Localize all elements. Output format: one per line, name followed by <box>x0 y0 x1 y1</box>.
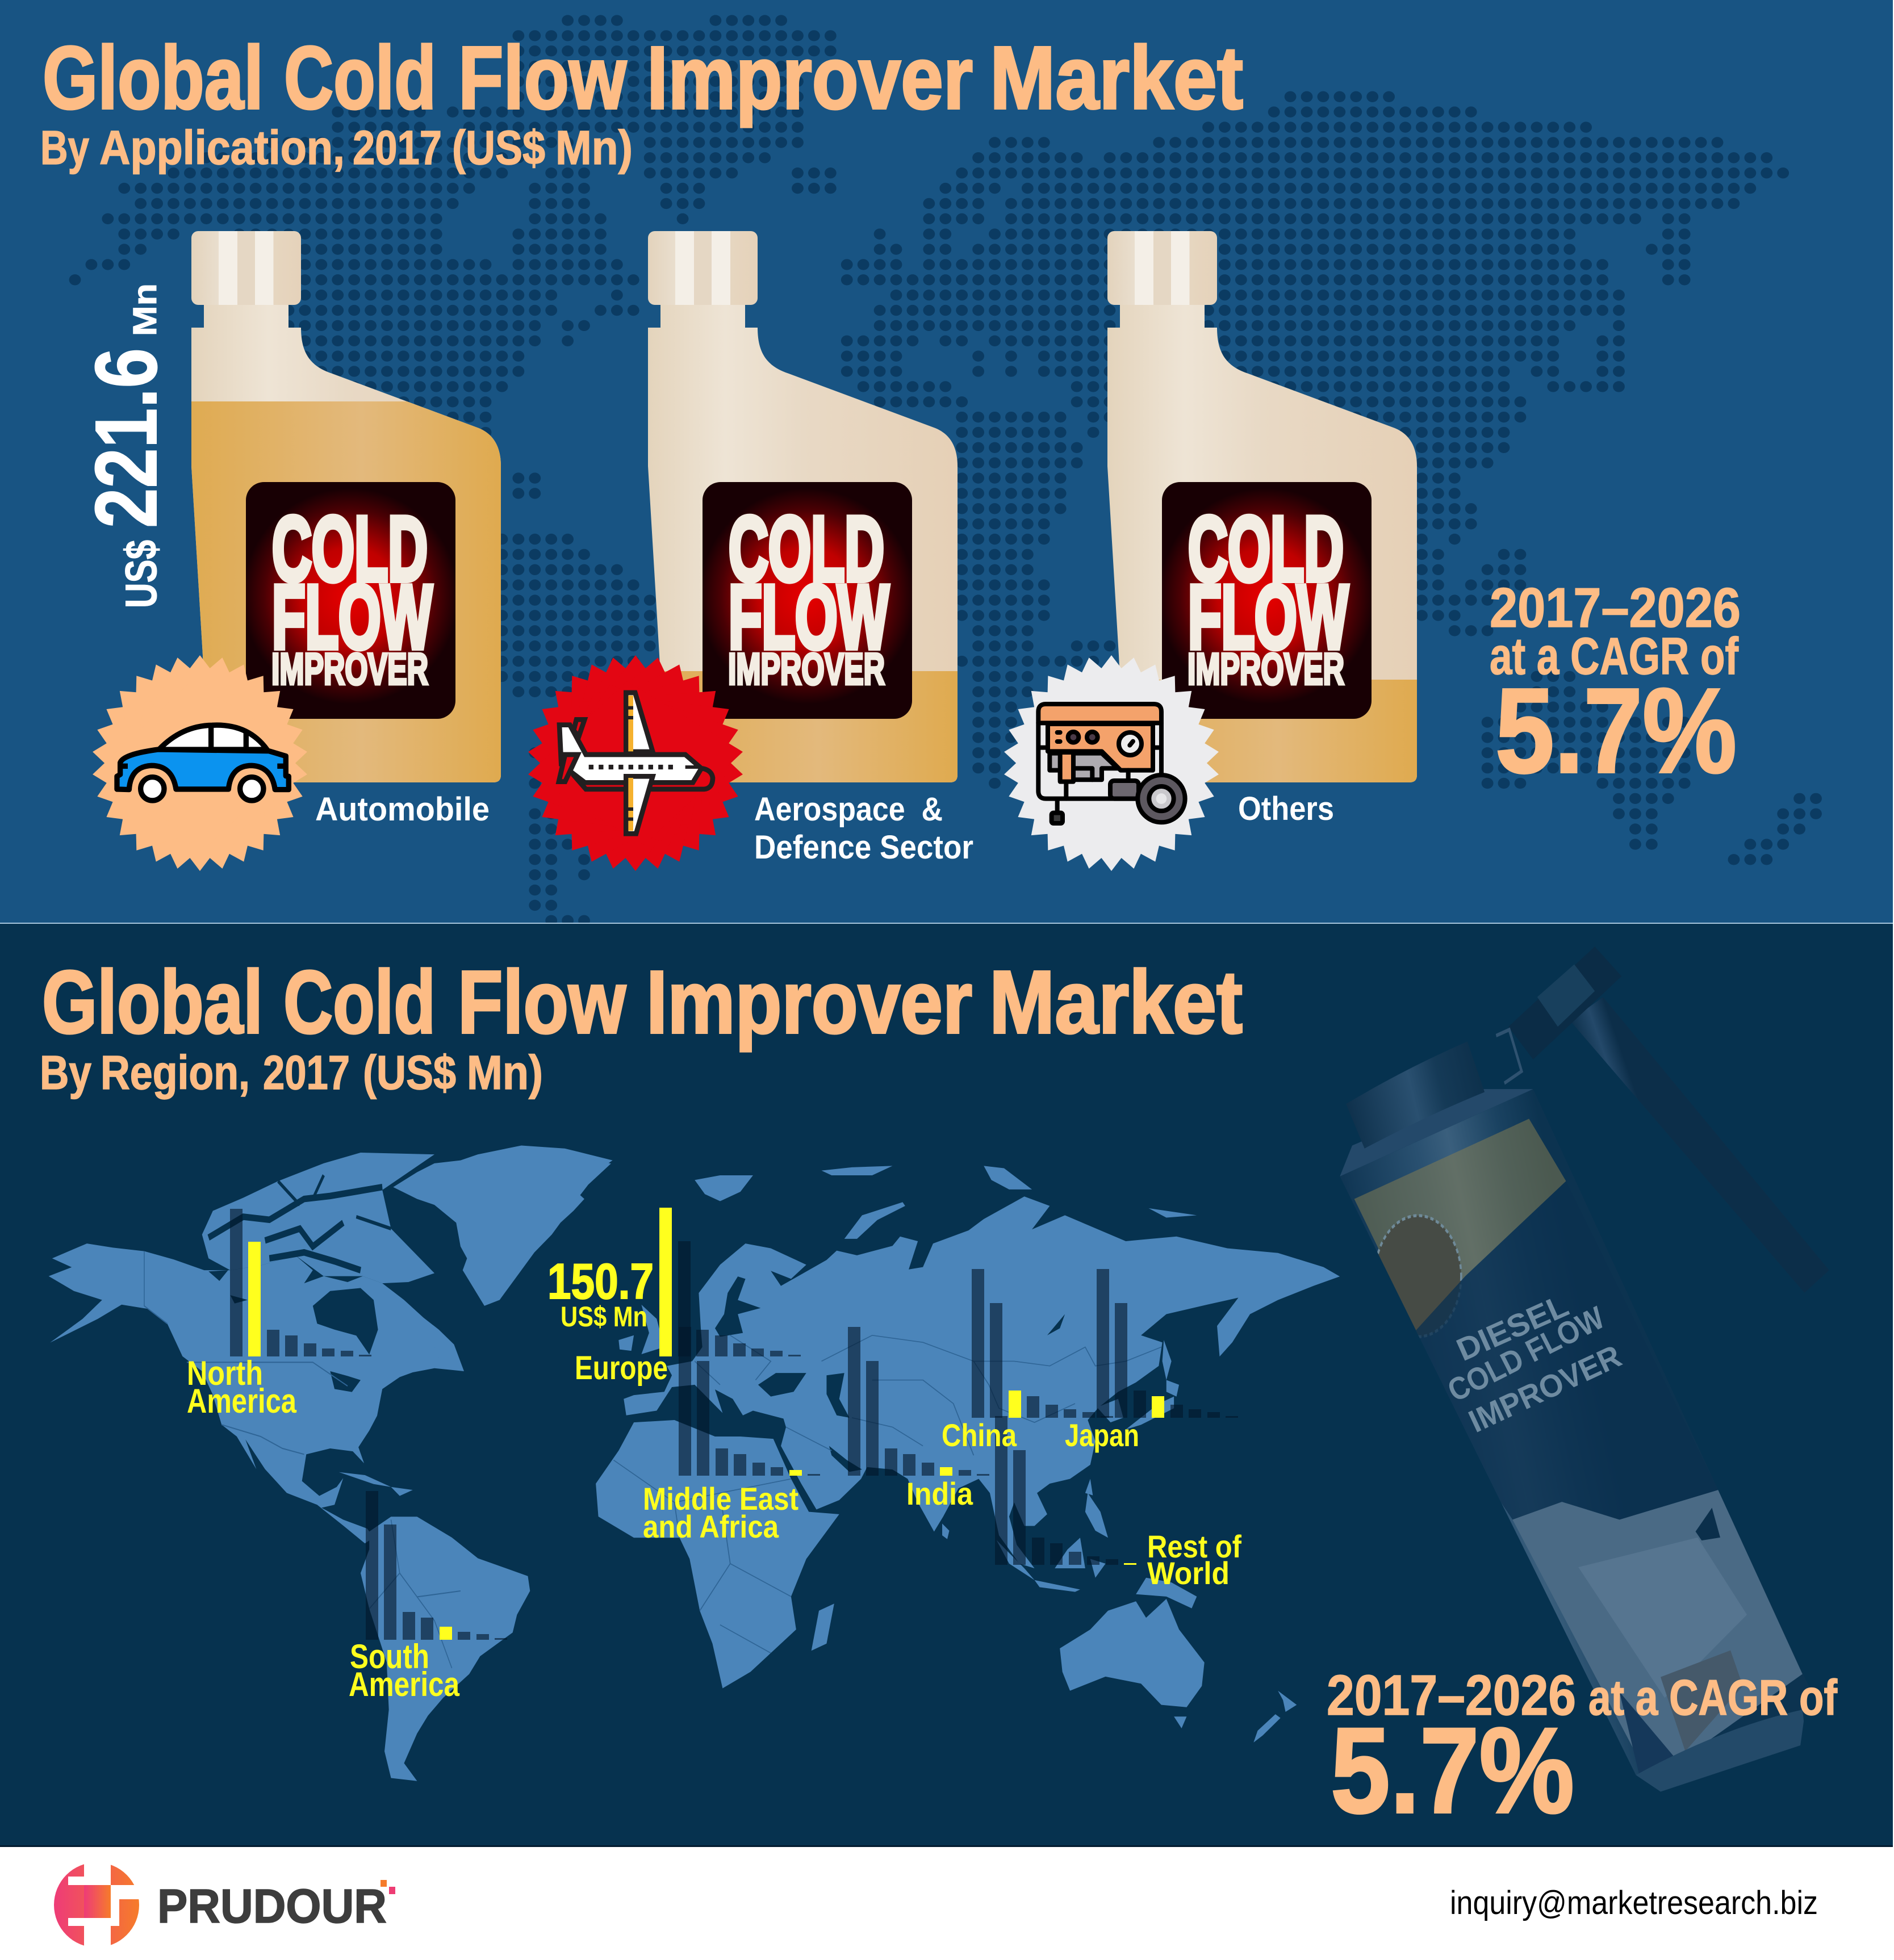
world map: Americas and Greenland <box>49 1145 613 1781</box>
bottle: others <box>1107 231 1417 783</box>
label: Rest of World <box>1147 1528 1241 1591</box>
bottle: aerospace: COLD <box>729 498 884 600</box>
title: by application: Cold <box>284 28 436 128</box>
badge: automobile star <box>65 627 335 899</box>
title: by application: Flow <box>458 28 627 128</box>
title: by application <box>40 28 1243 174</box>
bottle: automobile: FLOW <box>272 567 432 667</box>
bottom edge line <box>0 1845 1893 1847</box>
bottle photo: diesel cold flow improver: DIESEL <box>1451 1287 1574 1368</box>
callout: CAGR region <box>1327 1664 1838 1838</box>
label: South America <box>349 1637 460 1703</box>
callout: CAGR application: 5.7% <box>1495 663 1737 798</box>
bottle photo: diesel cold flow improver <box>1340 947 1829 1792</box>
divider line <box>0 923 1893 924</box>
label: aerospace and defence sector: Defence Sector <box>754 829 973 866</box>
logo: Prudour <box>54 1862 395 1948</box>
label: aerospace and defence sector <box>754 791 973 866</box>
bottle: others: FLOW <box>1188 567 1348 667</box>
bottle: aerospace <box>648 231 958 783</box>
bottle: automobile: IMPROVER <box>271 644 428 694</box>
bar chart: North America <box>230 1209 371 1356</box>
bottle: others: COLD <box>1188 498 1344 600</box>
title: by application: Global <box>43 28 264 128</box>
label: India: India <box>906 1476 973 1511</box>
title: by region: Market <box>989 953 1243 1052</box>
title: by region <box>40 953 1243 1099</box>
bottle: aerospace: IMPROVER <box>728 644 885 694</box>
logo: Prudour: PRUDOUR <box>157 1879 387 1933</box>
bottle: aerospace: FLOW <box>729 567 889 667</box>
label: others: Others <box>1238 790 1334 827</box>
value callout: Europe 150.7: Europe <box>575 1350 668 1387</box>
title: by region: Improver <box>646 953 972 1052</box>
title: by application: Improver <box>647 28 973 128</box>
title: by region: Cold <box>283 953 436 1052</box>
bottle photo: diesel cold flow improver: IMPROVER <box>1463 1338 1627 1439</box>
title: by application: Application, <box>99 121 345 174</box>
bottle: automobile <box>191 231 501 783</box>
icon: generator <box>1038 704 1185 823</box>
title: by region: Mn) <box>467 1046 543 1099</box>
bar chart: Rest of World <box>995 1416 1136 1565</box>
icon: airplane <box>559 693 713 834</box>
value callout: US$ 221.6 Mn: Mn <box>127 283 164 336</box>
bar chart: India <box>848 1327 989 1476</box>
bottle photo: diesel cold flow improver: COLD FLOW <box>1442 1299 1610 1409</box>
callout: CAGR region: 5.7% <box>1331 1703 1574 1838</box>
bar chart: Japan <box>1097 1269 1238 1418</box>
title: by region: By <box>40 1046 91 1099</box>
label: South America: South <box>350 1637 429 1676</box>
value callout: Europe 150.7: 150.7 <box>547 1253 654 1309</box>
value callout: Europe 150.7: US$ Mn <box>561 1301 647 1333</box>
value callout: US$ 221.6 Mn <box>77 283 175 608</box>
icon: car <box>117 725 289 801</box>
panel: by region background <box>0 924 1893 1845</box>
label: China: China <box>942 1417 1017 1453</box>
label: Rest of World: Rest of <box>1147 1528 1241 1564</box>
title: by application: Mn) <box>555 121 633 174</box>
label: Japan: Japan <box>1065 1417 1139 1453</box>
bar chart: South America <box>366 1491 507 1640</box>
bar chart: Middle East and Africa <box>679 1327 820 1476</box>
bar chart: Europe <box>659 1208 801 1356</box>
label: North America: America <box>187 1382 297 1420</box>
title: by region: 2017 <box>263 1046 350 1099</box>
value callout: Europe 150.7 <box>547 1253 668 1387</box>
panel: by application background <box>0 0 1893 923</box>
value callout: US$ 221.6 Mn: US$ <box>116 540 166 608</box>
callout: CAGR application: 2017–2026 <box>1490 576 1741 639</box>
label: North America <box>187 1354 297 1420</box>
title: by region: Flow <box>458 953 626 1052</box>
label: Middle East and Africa <box>643 1481 798 1544</box>
callout: CAGR region: at a CAGR of <box>1588 1669 1838 1726</box>
label: South America: America <box>349 1665 460 1703</box>
value callout: US$ 221.6 Mn: 221.6 <box>77 348 175 528</box>
badge: others star <box>976 627 1247 899</box>
callout: CAGR region: 2017–2026 <box>1327 1664 1576 1727</box>
title: by region: Region, <box>101 1046 250 1099</box>
title: by application: (US$ <box>452 121 545 174</box>
callout: CAGR application <box>1490 576 1741 798</box>
label: North America: North <box>187 1354 263 1392</box>
title: by region: Global <box>42 953 263 1052</box>
title: by region: (US$ <box>363 1046 456 1099</box>
world map: Eurasia, Africa, Oceania <box>568 1151 1340 1743</box>
label: Rest of World: World <box>1147 1555 1230 1591</box>
title: by application: By <box>40 121 89 174</box>
bottle: automobile: COLD <box>272 498 428 600</box>
dotted world map <box>75 20 1816 920</box>
title: by application: 2017 <box>353 121 442 174</box>
label: automobile: Automobile <box>315 791 490 828</box>
label: Middle East and Africa: Middle East <box>643 1481 798 1517</box>
bar chart: China <box>972 1269 1113 1418</box>
label: Middle East and Africa: and Africa <box>643 1509 779 1544</box>
title: by application: Market <box>990 28 1243 128</box>
label: aerospace and defence sector: Aerospace & <box>754 791 943 828</box>
bottle: others: IMPROVER <box>1188 644 1344 694</box>
badge: aerospace star <box>500 627 771 899</box>
contact email: inquiry@marketresearch.biz <box>1450 1884 1818 1921</box>
callout: CAGR application: at a CAGR of <box>1490 627 1738 685</box>
